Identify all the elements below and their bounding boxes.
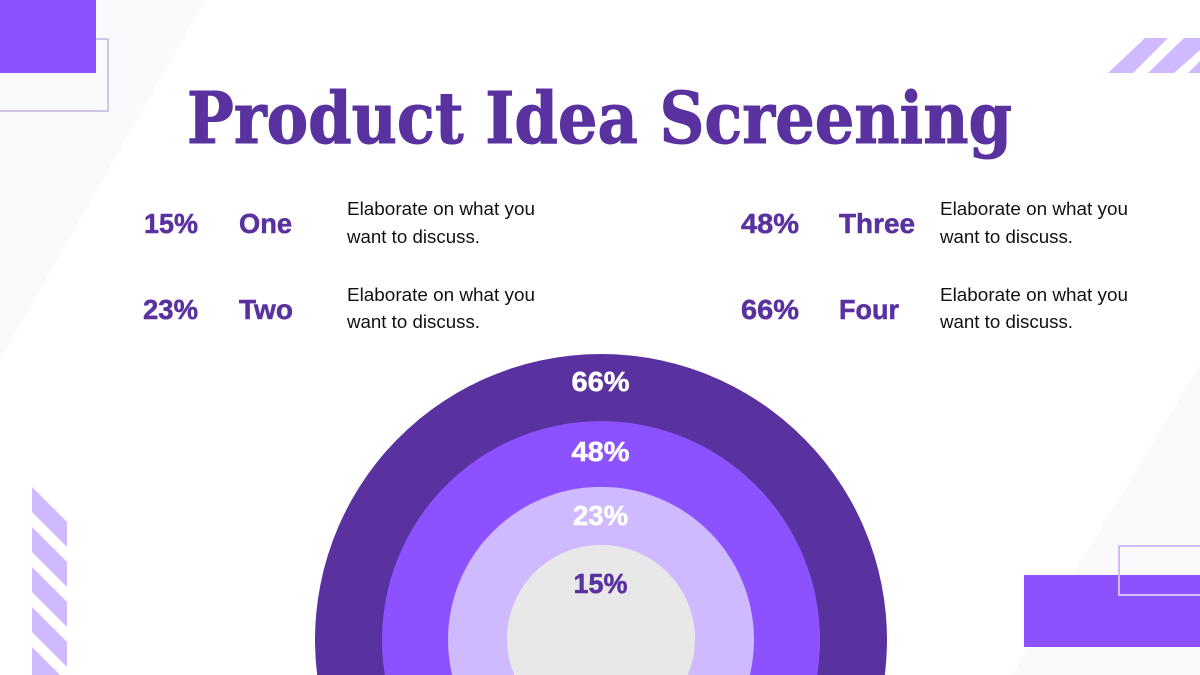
ring label: 15%: 15% <box>574 568 628 599</box>
percentage: 48%: 48% <box>741 208 799 239</box>
top-right diagonal stripes <box>1108 38 1200 73</box>
description: Two: want to discuss. <box>346 312 480 332</box>
legend item: One <box>144 199 535 247</box>
background panel: bottom-right light triangle <box>1012 365 1200 675</box>
background panel: top-left light triangle <box>0 0 205 360</box>
bottom-right outlined rectangle <box>1119 546 1200 595</box>
bottom-left diagonal stripes <box>32 487 67 675</box>
percentage: 15%: 15% <box>144 208 198 239</box>
description: Four: want to discuss. <box>939 312 1073 332</box>
legend item: Three <box>741 199 1128 247</box>
title: Product Idea Screening <box>187 76 1012 160</box>
ring: 66% <box>315 354 887 675</box>
label: Two: Two <box>239 294 293 325</box>
concentric semicircle chart <box>315 354 887 675</box>
top-left purple block <box>0 0 96 73</box>
legend item: Two <box>143 285 535 332</box>
bottom-right purple block <box>1024 575 1200 647</box>
ring label: 48%: 48% <box>572 436 630 467</box>
label: One: One <box>239 208 292 239</box>
label: Three: Three <box>839 208 915 239</box>
legend item: Four <box>741 285 1128 332</box>
description: Two: Elaborate on what you <box>347 285 535 305</box>
label: Four: Four <box>839 294 899 325</box>
description: Three: Elaborate on what you <box>940 199 1128 219</box>
description: Four: Elaborate on what you <box>940 285 1128 305</box>
ring label: 23%: 23% <box>573 500 628 531</box>
description: One: want to discuss. <box>346 227 480 247</box>
ring: 15% <box>507 545 695 675</box>
percentage: 66%: 66% <box>741 294 799 325</box>
ring: 23% <box>448 487 754 675</box>
description: Three: want to discuss. <box>939 227 1073 247</box>
description: One: Elaborate on what you <box>347 199 535 219</box>
top-left outlined rectangle <box>0 39 108 111</box>
ring label: 66%: 66% <box>572 366 630 397</box>
percentage: 23%: 23% <box>143 294 198 325</box>
ring: 48% <box>382 421 820 675</box>
